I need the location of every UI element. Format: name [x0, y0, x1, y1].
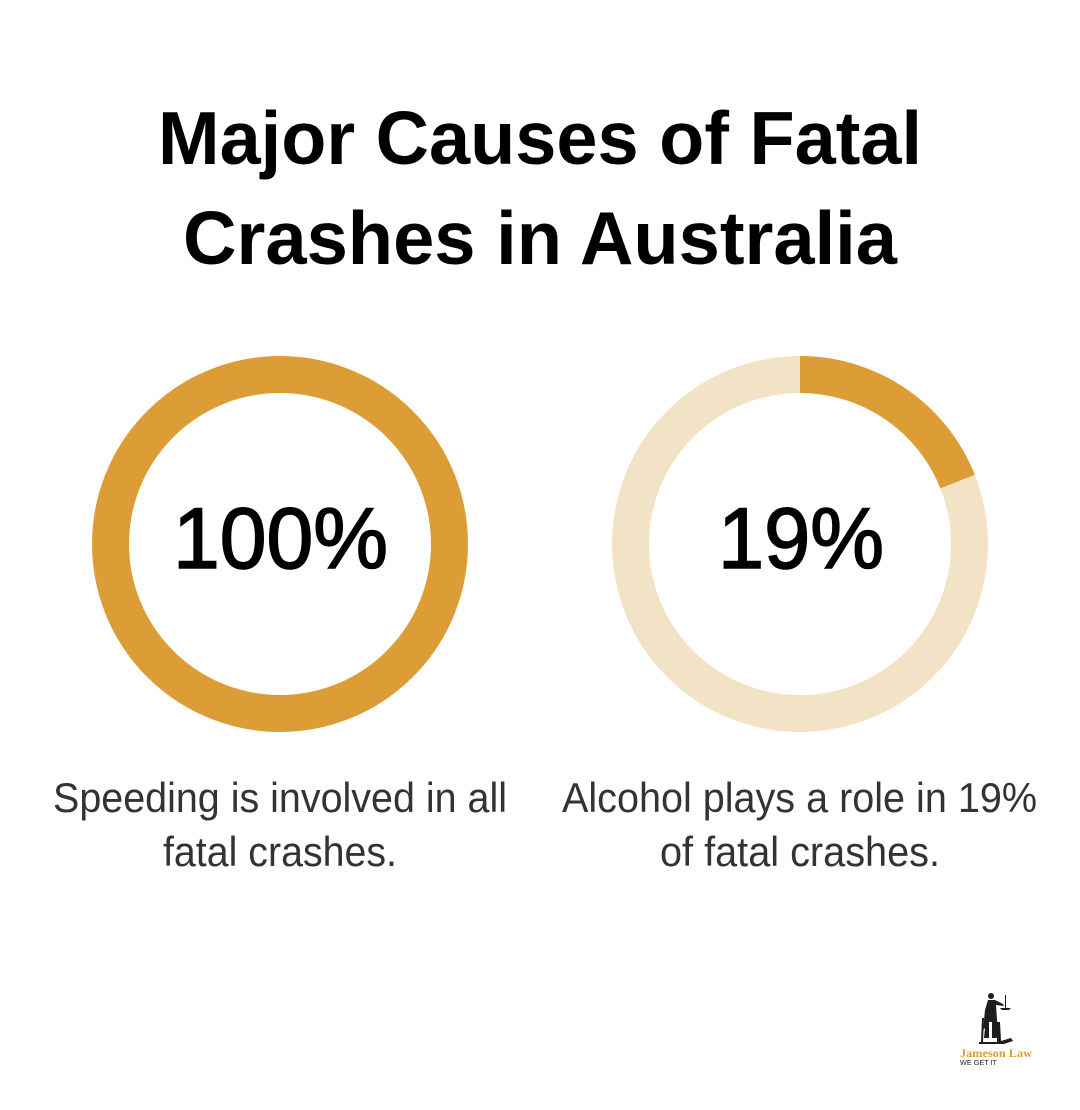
- caption: alcohol: of fatal crashes.: [660, 828, 940, 875]
- title: Major Causes of Fatal: [158, 96, 922, 180]
- title: Crashes in Australia: [183, 196, 898, 280]
- panel: alcohol: [562, 374, 1037, 875]
- caption: speeding: fatal crashes.: [163, 828, 397, 875]
- caption: speeding: Speeding is involved in all: [53, 774, 507, 821]
- panel: speeding: [53, 374, 507, 875]
- logo tagline: WE GET IT: [960, 1058, 997, 1067]
- donut chart: 100%: [110, 374, 450, 714]
- logo text: Jameson Law: [960, 1048, 1033, 1060]
- donut chart: 19%: [630, 374, 970, 714]
- value: 19%: 19%: [718, 491, 884, 587]
- logo: Jameson Law: [960, 993, 1033, 1067]
- caption: alcohol: [562, 774, 1037, 875]
- caption: speeding: [53, 774, 507, 875]
- title: [158, 96, 922, 280]
- icon: lady justice: [979, 993, 1013, 1044]
- value: 100%: 100%: [173, 491, 388, 587]
- caption: alcohol: Alcohol plays a role in 19%: [562, 774, 1037, 821]
